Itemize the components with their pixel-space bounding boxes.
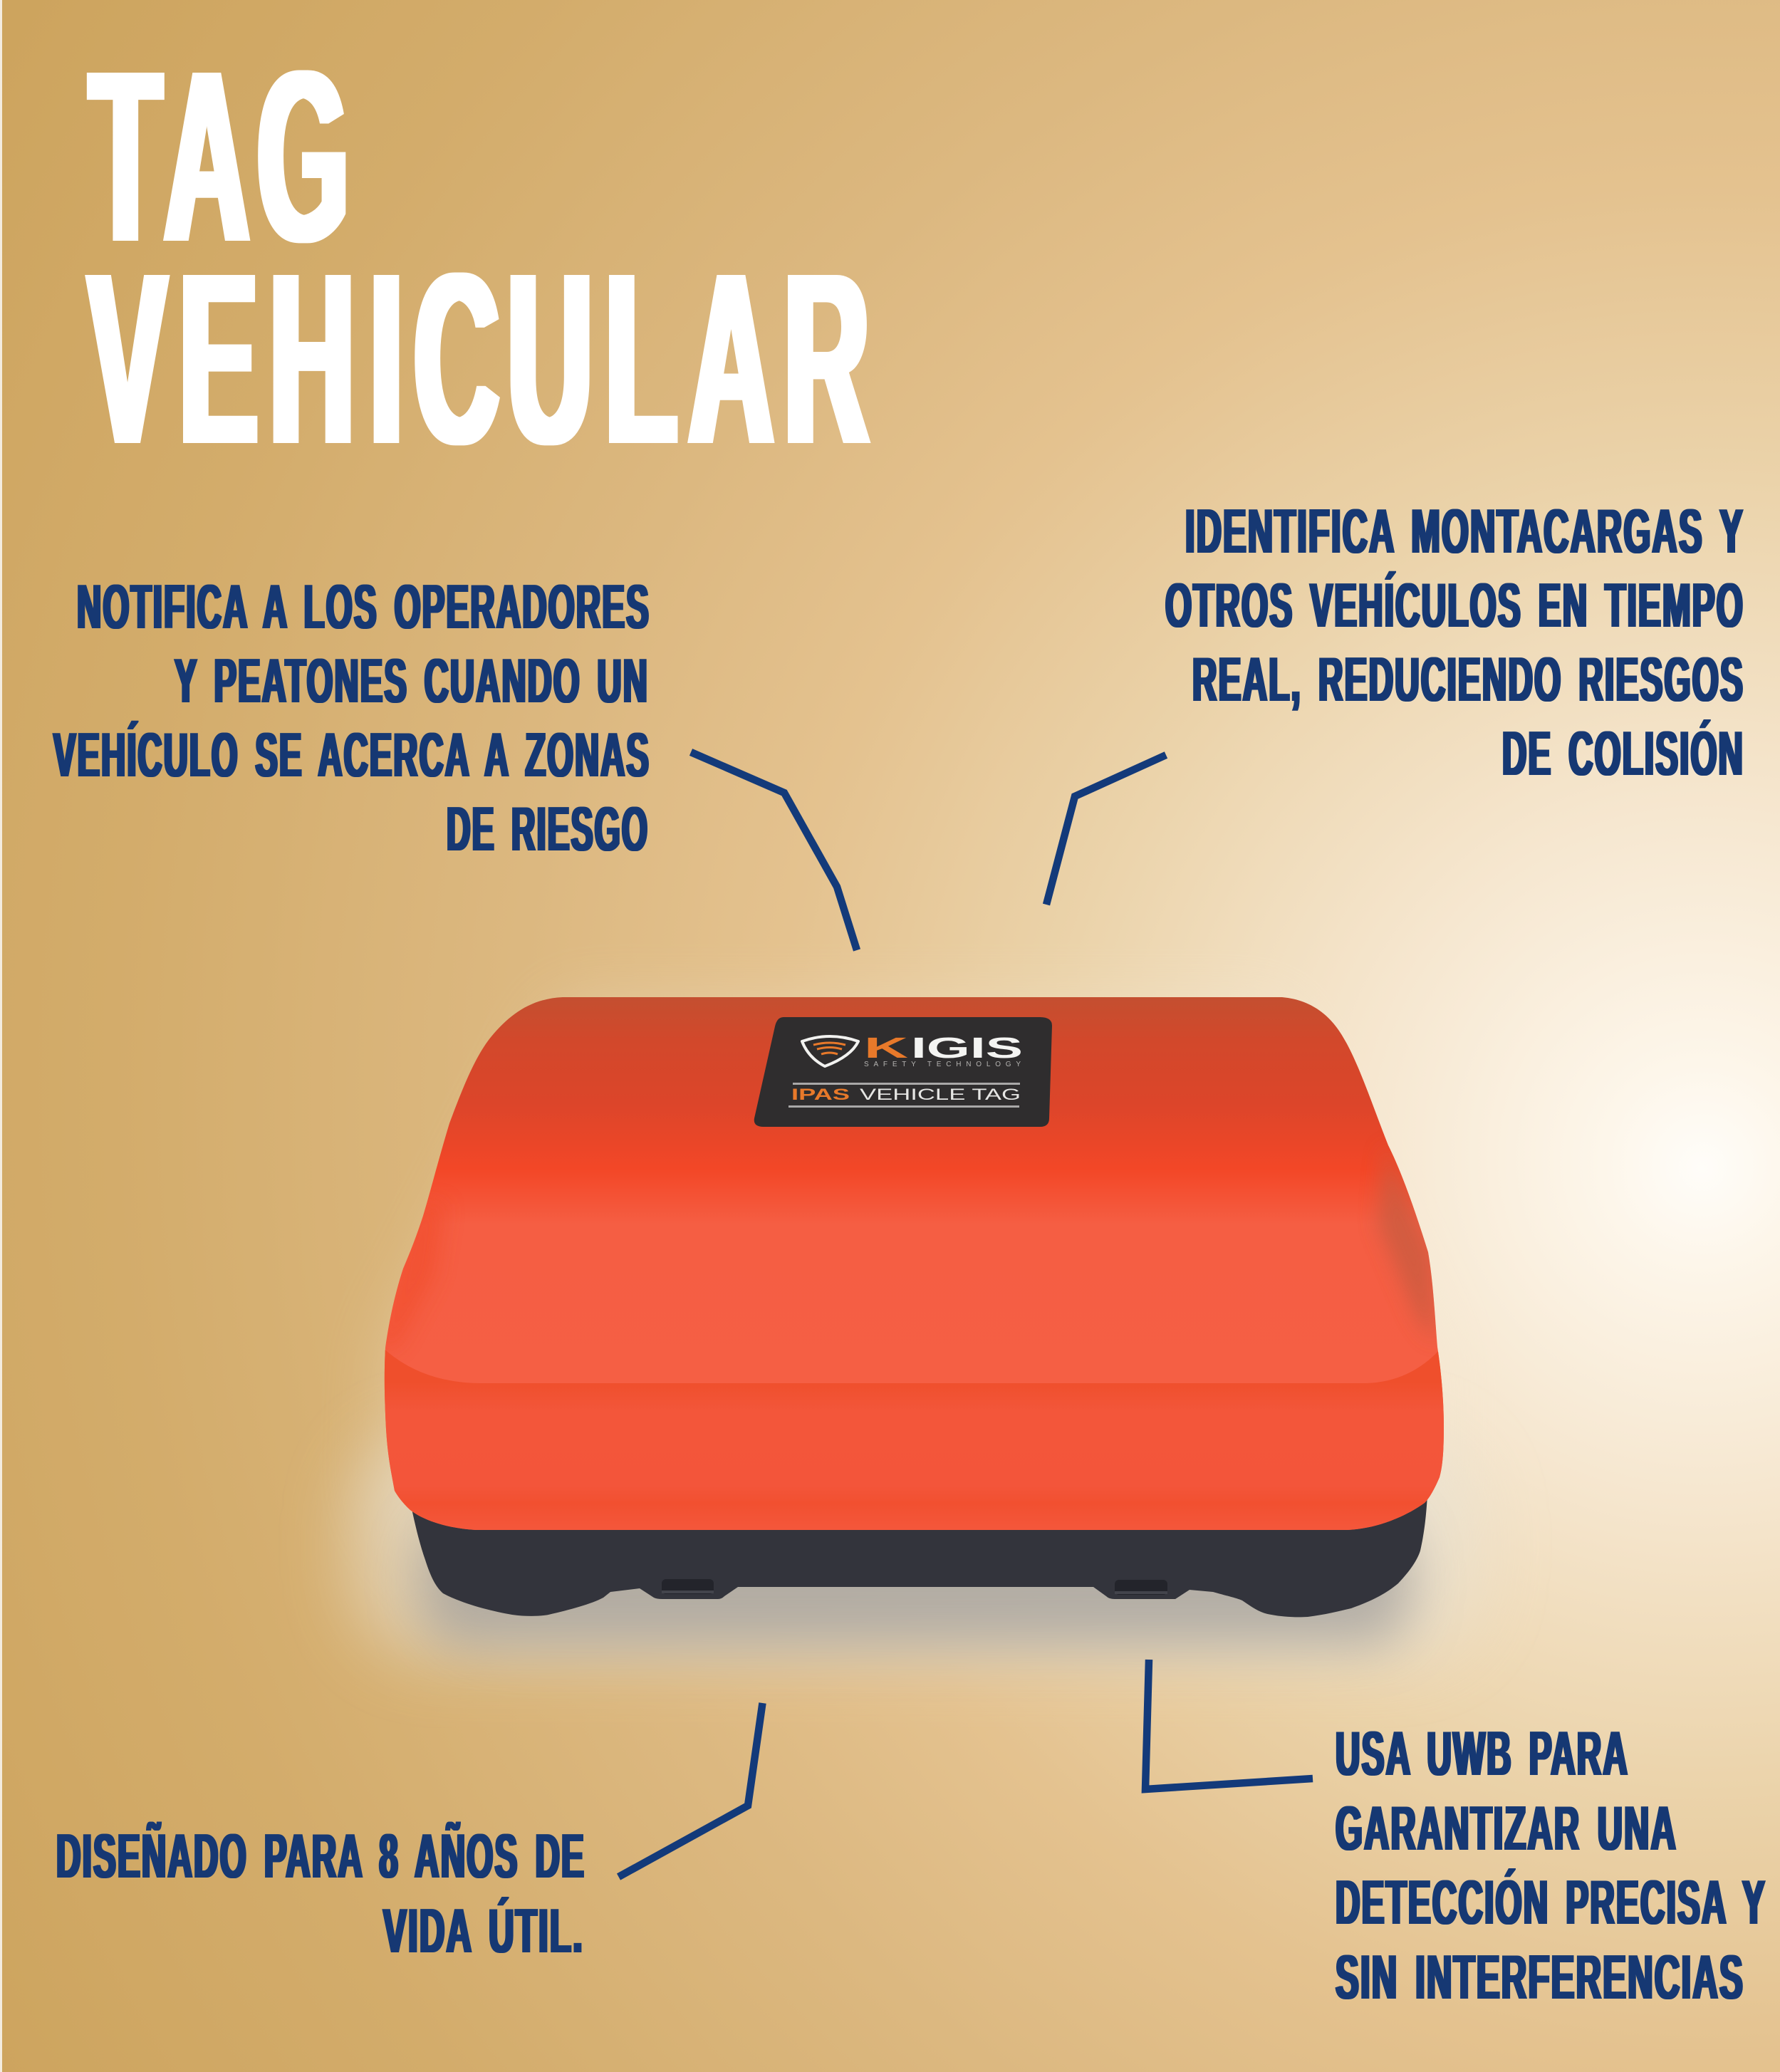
- text block: notifica a los operadores: NOTIFICA A LOS OPERADORES: [77, 571, 650, 642]
- device glow and shadow: [349, 1004, 1482, 1660]
- device: vehicle tag: [356, 983, 1467, 1617]
- left edge strip: [0, 0, 2, 2072]
- cover lower band: [378, 1343, 1453, 1539]
- text block: notifica a los operadores: VEHÍCULO SE ACERCA A ZONAS: [53, 719, 650, 790]
- logo text: IGIS: [911, 1031, 1023, 1064]
- text block: disenado para 8 anos: DISEÑADO PARA 8 AÑOS DE: [56, 1821, 585, 1891]
- arrow: to usa uwb text: [1145, 1660, 1313, 1789]
- title: [88, 20, 869, 496]
- product name: [791, 1086, 1021, 1103]
- text block: identifica montacargas: [1165, 496, 1744, 788]
- cover right side shade: [1378, 1143, 1436, 1343]
- text block: usa uwb para: [1336, 1718, 1766, 2012]
- device red cover: [356, 983, 1467, 1546]
- base slot left: [662, 1579, 714, 1594]
- device base: [412, 1496, 1427, 1617]
- arrow: to disenado text: [618, 1703, 762, 1877]
- title: TAG: [90, 20, 349, 293]
- text block: notifica a los operadores: DE RIESGO: [447, 793, 649, 864]
- arrow: to notifica text: [691, 752, 857, 950]
- arrow: to identifica text: [1046, 755, 1166, 905]
- logo text: [864, 1031, 1023, 1068]
- logo text: K: [864, 1031, 909, 1064]
- text block: notifica a los operadores: [53, 571, 650, 864]
- text block: disenado para 8 anos: [56, 1821, 585, 1966]
- label: KIGIS IPAS VEHICLE TAG: [754, 1017, 1052, 1127]
- product name: VEHICLE TAG: [860, 1086, 1021, 1103]
- cover left side shade: [386, 1205, 443, 1344]
- text block: notifica a los operadores: Y PEATONES CUANDO UN: [175, 645, 649, 716]
- base slot right: [1115, 1580, 1167, 1595]
- title: VEHICULAR: [88, 222, 869, 496]
- product name: IPAS: [791, 1086, 850, 1103]
- icon: shield with signal waves: [802, 1036, 858, 1066]
- text block: disenado para 8 anos: VIDA ÚTIL.: [383, 1895, 584, 1966]
- logo text: SAFETY TECHNOLOGY: [864, 1061, 1021, 1068]
